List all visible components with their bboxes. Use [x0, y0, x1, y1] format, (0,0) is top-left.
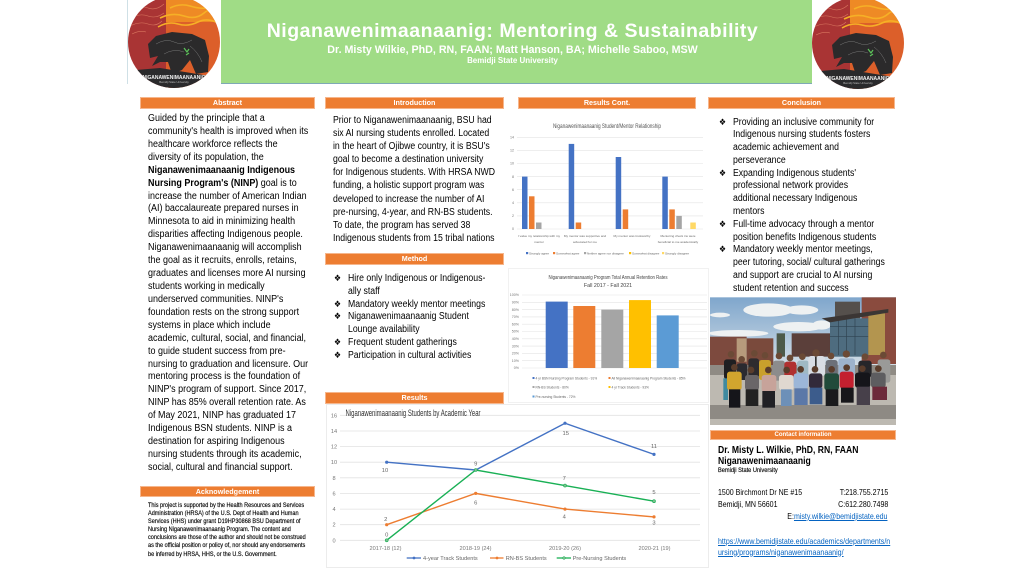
conclusion list: Full-time advocacy through a mentor: [733, 219, 874, 230]
chart: student mentor relationship: advocated for me: [573, 240, 597, 244]
chart: students by academic year: 2019-20 (26): [549, 546, 581, 552]
acknowledgement text: This project is supported by the Health Resources and Services: [148, 502, 304, 509]
method list: ally staff: [348, 286, 380, 297]
chart: total annual retention rates: 40%: [512, 337, 520, 341]
contact block: [718, 445, 890, 557]
chart: student mentor relationship: 14: [510, 136, 514, 140]
abstract text: diversity of its population, the: [148, 152, 264, 163]
chart: students by academic year: 2017-18 (12): [369, 546, 402, 552]
contact address: 1500 Birchmont Dr NE #15: [718, 488, 802, 496]
abstract text: increase the number of American Indian: [148, 191, 307, 202]
chart: total annual retention rates: 4 yr Track Students - 93%: [612, 385, 649, 389]
conclusion list: Expanding Indigenous students': [733, 168, 856, 179]
conclusion list: additional necessary Indigenous: [733, 193, 857, 204]
chart: total annual retention rates: Pre-nursing Students - 72%: [536, 395, 576, 399]
chart: total annual retention rates: 80%: [512, 308, 520, 312]
chart: students by academic year: 2020-21 (19): [638, 546, 671, 552]
chart: student mentor relationship: Mentoring check ins were: [660, 234, 696, 238]
text: ❖: [334, 351, 341, 361]
chart: students by academic year: 11: [651, 444, 657, 450]
contact name: Niganawenimaanaanig: [718, 456, 811, 466]
chart: students by academic year: 0: [385, 532, 388, 538]
conclusion list: Mandatory weekly mentor meetings,: [733, 244, 873, 255]
chart: student mentor relationship: 2: [512, 214, 514, 218]
chart: total annual retention rates: 4 yr BSN Nursing Program Students - 91%: [536, 376, 597, 380]
abstract text: [148, 113, 308, 473]
method list: Frequent student gatherings: [348, 337, 457, 348]
heading: conclusion: [708, 97, 895, 109]
method list: [334, 273, 485, 361]
icon: right logo: NIGANAWENIMAANAANIG: [826, 76, 890, 82]
series: 4-year track: [385, 422, 656, 472]
chart: students by academic year: 3: [652, 521, 656, 527]
conclusion list: academic achievement and: [733, 142, 839, 153]
chart: student mentor relationship: 0: [512, 227, 514, 231]
chart: total annual retention rates: 0%: [514, 366, 520, 370]
abstract text: graduates and licenses more AI nursing: [148, 268, 306, 279]
heading: results cont: [518, 97, 696, 109]
chart: students by academic year: 2018-19 (24): [459, 546, 492, 552]
acknowledgement text: conclusions are those of the author and should not be construed: [148, 534, 306, 541]
conclusion list: position benefits Indigenous students: [733, 232, 876, 243]
abstract text: the goal as it recruits, enrolls, retains,: [148, 255, 297, 266]
abstract text: destination for aspiring Indigenous: [148, 436, 285, 447]
chart: student mentor relationship: 4: [512, 201, 514, 205]
photo: group of students and staff: [710, 297, 896, 425]
chart: student mentor relationship: Strongly disagree: [665, 252, 689, 256]
chart: student mentor relationship: 8: [512, 175, 514, 179]
chart: students by academic year: 4: [563, 515, 567, 521]
acknowledgement text: Nursing Niganawenimaanaanig Program. The content and: [148, 526, 291, 533]
chart: students by academic year: 4: [332, 507, 336, 513]
contact phones: T:218.755.2715: [839, 488, 888, 496]
conclusion list: Indigenous nursing students fosters: [733, 129, 870, 140]
introduction text: pre-nursing, 4-year, and RN-BS students.: [333, 207, 493, 218]
chart: student mentor relationship: Strongly agree: [529, 252, 549, 256]
chart: student mentor relationship: mentor: [534, 240, 544, 244]
chart: students by academic year: 4-year Track Students: [423, 556, 478, 562]
contact address: Bemidji, MN 56601: [718, 500, 777, 508]
heading: results: Results: [402, 393, 427, 402]
chart title: Niganawenimaanaanig Program Total Annual Retention Rates: [548, 275, 668, 281]
acknowledgement text: Administration (HRSA) of the U.S. Dept of Health and Human: [148, 510, 299, 517]
conclusion list: perseverance: [733, 155, 786, 166]
heading: method: Method: [402, 254, 427, 263]
chart: total annual retention rates: 10%: [512, 359, 520, 363]
text: ❖: [334, 300, 341, 310]
abstract text: community's health is improved when its: [148, 126, 308, 137]
chart: student mentor relationship: My mentor was trustworthy: [614, 234, 651, 238]
conclusion list: and support are crucial to AI nursing: [733, 270, 872, 281]
abstract text: to guide student success from pre-: [148, 346, 286, 357]
chart: students by academic year: 6: [332, 491, 336, 497]
chart: total annual retention rates: 70%: [512, 315, 520, 319]
contact phones: C:612.280.7498: [838, 500, 888, 508]
conclusion list: [719, 116, 885, 294]
text: ❖: [334, 274, 341, 284]
method list: Participation in cultural activities: [348, 350, 471, 361]
chart: student mentor relationship: beneficial to me academically: [658, 240, 699, 244]
chart: student mentor relationship: 10: [510, 162, 514, 166]
icon: right logo: Bemidji State University: [843, 81, 873, 85]
heading: contact information: [710, 430, 896, 440]
acknowledgement text: Services (HHS) under grant D19HP30868 BSU Department of: [148, 518, 300, 525]
heading: acknowledgement: [140, 486, 315, 497]
chart: students by academic year: 8: [332, 476, 336, 482]
abstract text: systems in place which include: [148, 320, 271, 331]
chart: student mentor relationship: Neither agree nor disagree: [587, 252, 624, 256]
heading: introduction: Introduction: [394, 98, 435, 107]
text: ❖: [334, 338, 341, 348]
chart: total annual retention rates: 30%: [512, 344, 520, 348]
contact name: [718, 445, 858, 466]
chart: students by academic year: 14: [331, 429, 337, 435]
contact link: ursing/programs/niganawenimaanaanig/: [718, 548, 844, 556]
abstract text: Niganawenimaanaanig Indigenous: [148, 165, 295, 176]
chart: total annual retention rates: 100%: [510, 293, 520, 297]
back row: [723, 349, 890, 400]
heading: results cont: Results Cont.: [584, 98, 630, 107]
chart: student mentor relationship: Somewhat disagree: [632, 252, 660, 256]
abstract text: Minnesota to aid in minimizing health: [148, 216, 295, 227]
introduction text: funding, a holistic support program was: [333, 180, 484, 191]
chart: total annual retention rates: 60%: [512, 322, 520, 326]
acknowledgement text: as the official position or policy of, nor should any endorsements: [148, 542, 305, 549]
chart: students by academic year: 0: [332, 538, 336, 544]
acknowledgement text: be inferred by HRSA, HHS, or the U.S. Government.: [148, 551, 277, 558]
contact address: [718, 488, 802, 508]
series: pre-nursing: [385, 468, 656, 542]
authors: Dr. Misty Wilkie, PhD, RN, FAAN; Matt Hanson, BA; Michelle Saboo, MSW: [327, 44, 698, 56]
chart title: Niganawenimaanaanig Student/Mentor Relationship: [553, 123, 661, 130]
introduction text: goal to become a destination university: [333, 154, 483, 165]
introduction text: To date, the program has served 38: [333, 220, 470, 231]
text: ❖: [719, 118, 726, 128]
abstract text: nursing students through its academic,: [148, 449, 302, 460]
abstract text: social, cultural and financial support.: [148, 462, 293, 473]
acknowledgement text: [148, 502, 306, 558]
abstract text: disparities affecting Indigenous people.: [148, 229, 303, 240]
header banner: [221, 0, 812, 84]
abstract text: mentoring process is the foundation of: [148, 371, 300, 382]
text: ❖: [719, 169, 726, 179]
chart: student mentor relationship: 6: [512, 188, 514, 192]
heading: conclusion: Conclusion: [782, 98, 821, 107]
abstract text: academic, cultural, social, and financial,: [148, 333, 306, 344]
icon: left logo: [128, 0, 220, 88]
introduction text: Prior to Niganawenimaanaanig, BSU had: [333, 115, 492, 126]
abstract text: healthcare workforce reflects the: [148, 139, 278, 150]
heading: abstract: Abstract: [213, 98, 242, 107]
icon: right logo: [812, 0, 904, 89]
chart: student mentor relationship: My mentor was supportive and: [564, 234, 606, 238]
abstract text: students working in medically: [148, 281, 265, 292]
method list: Hire only Indigenous or Indigenous-: [348, 273, 485, 284]
contact university: Bemidji State University: [718, 466, 778, 474]
icon: left logo: Bemidji State University: [159, 80, 189, 84]
abstract text: Guided by the principle that a: [148, 113, 265, 124]
method list: Lounge availability: [348, 324, 420, 335]
contact link: https://www.bemidjistate.edu/academics/departments/n: [718, 536, 890, 546]
conclusion list: peer tutoring, social/ cultural gatherings: [733, 257, 885, 268]
abstract text: Nursing Program's (NINP) goal is to: [148, 178, 297, 189]
abstract text: nursing to graduation and licensure. Our: [148, 359, 308, 370]
front row: [727, 364, 887, 408]
heading: method: [325, 253, 504, 265]
chart: students by academic year: 2: [384, 517, 387, 523]
introduction text: six AI nursing students enrolled. Located: [333, 128, 489, 139]
university: Bemidji State University: [467, 56, 558, 64]
heading: results: [325, 392, 504, 404]
chart: total annual retention rates: 90%: [512, 300, 520, 304]
abstract text: foundation rests on the strong support: [148, 307, 299, 318]
chart: students by academic year: 12: [331, 445, 337, 451]
text: ❖: [334, 312, 341, 322]
abstract text: of May 2021, NINP has graduated 17: [148, 410, 296, 421]
chart: student mentor relationship: I value my relationship with my: [518, 234, 561, 238]
introduction text: Indigenous students from 15 tribal nations: [333, 233, 495, 244]
conclusion list: professional network provides: [733, 180, 848, 191]
introduction text: for Indigenous students. With HRSA NWD: [333, 167, 495, 178]
chart: total annual retention rates: All Niganawenimaanaanig Program Students - 85%: [612, 376, 686, 380]
contact name: Dr. Misty L. Wilkie, PhD, RN, FAAN: [718, 445, 858, 456]
contact link: [718, 536, 890, 557]
abstract text: Niganawenimaanaanig will accomplish: [148, 242, 302, 253]
conclusion list: mentors: [733, 206, 764, 217]
abstract text: (AI) baccalaureate prepared nurses in: [148, 203, 299, 214]
chart: students by academic year: 10: [331, 460, 337, 466]
text: ❖: [719, 220, 726, 230]
chart: students by academic year: 2: [332, 523, 336, 529]
contact phones: [838, 488, 888, 508]
chart: students by academic year: 5: [652, 490, 656, 496]
chart: student mentor relationship: 12: [510, 149, 514, 153]
text: ❖: [719, 245, 726, 255]
chart: total annual retention rates: RN-BS Students - 80%: [536, 385, 569, 389]
icon: left logo: NIGANAWENIMAANAANIG: [142, 75, 206, 81]
chart: students by academic year: 6: [474, 500, 477, 506]
chart: students by academic year: Pre-Nursing Students: [573, 556, 626, 562]
chart: total annual retention rates: 50%: [512, 330, 520, 334]
chart: students by academic year: 16: [331, 413, 337, 419]
left edge rule: [127, 0, 128, 84]
abstract text: NINP's program of support. Since 2017,: [148, 384, 306, 395]
chart: students by academic year: 7: [563, 476, 566, 482]
series: RN-BS: [385, 492, 656, 526]
chart title: Niganawenimaanaanig Students by Academic Year: [346, 408, 480, 419]
conclusion list: Providing an inclusive community for: [733, 116, 874, 128]
chart: students by academic year: 10: [382, 468, 388, 474]
chart: student mentor relationship: Somewhat agree: [556, 252, 580, 256]
conclusion list: student retention and success: [733, 283, 849, 294]
contact email: E:misty.wilkie@bemidjistate.edu: [787, 512, 887, 521]
abstract text: Indigenous BSN students. NINP is a: [148, 423, 292, 434]
method list: Niganawenimaanaanig Student: [348, 311, 469, 322]
heading: introduction: [325, 97, 504, 109]
method list: Mandatory weekly mentor meetings: [348, 299, 485, 310]
chart: total annual retention rates: 20%: [512, 352, 520, 356]
heading: contact information: Contact information: [774, 432, 832, 438]
chart: students by academic year: 15: [562, 431, 569, 437]
heading: abstract: [140, 97, 315, 109]
chart: students by academic year: 9: [474, 462, 477, 468]
heading: acknowledgement: Acknowledgement: [196, 487, 259, 496]
title: Niganawenimaanaanig: Mentoring & Sustainability: [267, 20, 758, 42]
abstract text: underserved communities. NINP's: [148, 294, 283, 305]
introduction text: developed to increase the number of AI: [333, 194, 484, 205]
chart: total annual retention rates: Fall 2017 - Fall 2021: [584, 283, 632, 289]
introduction text: in the heart of Ojibwe country, it is BSU's: [333, 141, 490, 152]
chart: students by academic year: RN-BS Students: [506, 556, 547, 562]
introduction text: [333, 115, 495, 244]
abstract text: NINP has 85% overall retention rate. As: [148, 397, 306, 408]
